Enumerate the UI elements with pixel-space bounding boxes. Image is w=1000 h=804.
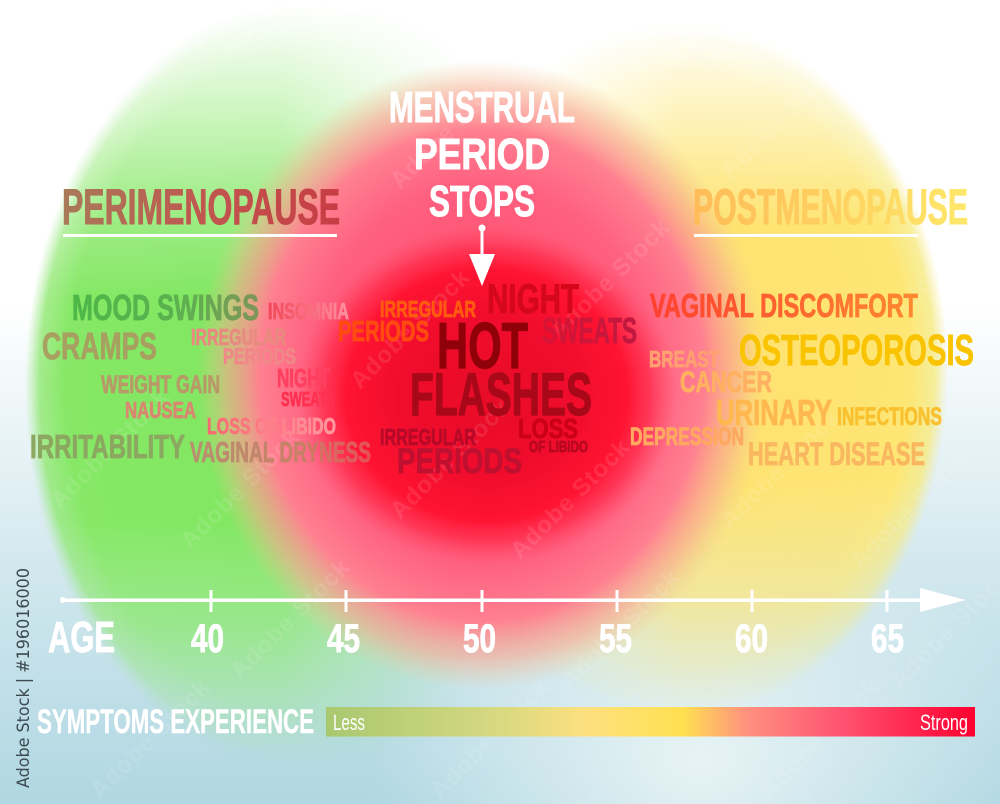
- age labels: 55: [599, 617, 632, 661]
- word cloud: menopause symptoms: IRREGULAR: [380, 296, 476, 322]
- watermark: Adobe Stock: [715, 54, 846, 184]
- watermark: Adobe Stock: [545, 214, 676, 344]
- age labels: AGE: [48, 613, 115, 662]
- watermark: Adobe Stock: [175, 424, 306, 554]
- word cloud: perimenopause symptoms: PERIODS: [223, 344, 296, 369]
- watermark: Adobe Stock: [385, 394, 516, 524]
- word cloud: menopause symptoms: NIGHT: [487, 275, 579, 322]
- title: menstrual period stops: STOPS: [429, 177, 535, 226]
- watermark: Adobe Stock: [555, 564, 686, 694]
- age labels: 50: [463, 617, 496, 661]
- legend: symptoms experience: Strong: [920, 710, 968, 735]
- word cloud: perimenopause symptoms: NIGHT: [277, 363, 330, 393]
- word cloud: postmenopause symptoms: [630, 287, 974, 472]
- watermark: Adobe Stock: [385, 64, 516, 194]
- watermark: Adobe Stock: [45, 384, 176, 514]
- word cloud: perimenopause symptoms: VAGINAL DRYNESS: [190, 437, 371, 469]
- age labels: 65: [871, 617, 904, 661]
- arrow: menstrual period stops to centre: [469, 224, 495, 286]
- watermark: Adobe Stock: [345, 264, 476, 394]
- word cloud: menopause symptoms: FLASHES: [410, 361, 592, 428]
- word cloud: postmenopause symptoms: URINARY: [716, 392, 832, 433]
- word cloud: menopause symptoms: PERIODS: [338, 316, 429, 348]
- watermark: Adobe Stock: [425, 674, 556, 804]
- age labels: 40: [191, 617, 224, 661]
- word cloud: postmenopause symptoms: INFECTIONS: [837, 403, 942, 431]
- word cloud: perimenopause symptoms: CRAMPS: [42, 326, 157, 368]
- word cloud: perimenopause symptoms: SWEATS: [281, 389, 335, 411]
- word cloud: perimenopause symptoms: NAUSEA: [125, 397, 196, 423]
- word cloud: perimenopause symptoms: IRRITABILITY: [30, 428, 185, 465]
- watermark: Adobe Stock: [755, 674, 886, 804]
- word cloud: menopause symptoms: PERIODS: [397, 442, 522, 481]
- title: menstrual period stops: PERIOD: [414, 130, 550, 179]
- watermark: Adobe Stock: [845, 444, 976, 574]
- title: menstrual period stops: [389, 83, 575, 226]
- title: menstrual period stops: MENSTRUAL: [389, 83, 575, 132]
- word cloud: postmenopause symptoms: CANCER: [680, 366, 772, 399]
- word cloud: perimenopause symptoms: INSOMNIA: [268, 298, 349, 324]
- word cloud: menopause symptoms: IRREGULAR: [380, 424, 476, 450]
- legend: symptoms experience: SYMPTOMS EXPERIENCE: [37, 703, 314, 741]
- age axis with ticks: [60, 588, 966, 612]
- word cloud: perimenopause symptoms: [30, 287, 371, 469]
- word cloud: perimenopause symptoms: MOOD SWINGS: [72, 287, 259, 328]
- age labels: 45: [327, 617, 360, 661]
- word cloud: menopause symptoms: LOSS: [518, 413, 578, 444]
- legend: symptoms experience: Less: [333, 710, 365, 735]
- watermark: Adobe Stock: [505, 434, 636, 564]
- age labels: 60: [735, 617, 768, 661]
- stock id side label: Adobe Stock | #196016000: [14, 568, 34, 788]
- word cloud: menopause symptoms: SWEATS: [542, 310, 637, 351]
- word cloud: postmenopause symptoms: DEPRESSION: [630, 423, 744, 451]
- word cloud: perimenopause symptoms: LOSS OF LIBIDO: [207, 413, 336, 439]
- word cloud: perimenopause symptoms: IRREGULAR: [191, 324, 286, 350]
- watermark: Adobe Stock: [85, 674, 216, 804]
- heading: perimenopause: [62, 179, 340, 237]
- word cloud: perimenopause symptoms: WEIGHT GAIN: [101, 371, 220, 399]
- age labels: [48, 613, 904, 662]
- word cloud: postmenopause symptoms: BREAST: [649, 346, 719, 372]
- word cloud: postmenopause symptoms: HEART DISEASE: [748, 436, 925, 472]
- legend: symptoms experience: [37, 703, 975, 741]
- word cloud: menopause symptoms: HOT: [437, 309, 528, 382]
- heading: perimenopause: PERIMENOPAUSE: [62, 179, 340, 235]
- watermark: Adobe Stock: [715, 404, 846, 534]
- word cloud: menopause symptoms: OF LIBIDO: [529, 439, 588, 456]
- watermark: Adobe Stock: [225, 554, 356, 684]
- watermark: Adobe Stock: [45, 54, 176, 184]
- word cloud: menopause symptoms: [338, 275, 637, 481]
